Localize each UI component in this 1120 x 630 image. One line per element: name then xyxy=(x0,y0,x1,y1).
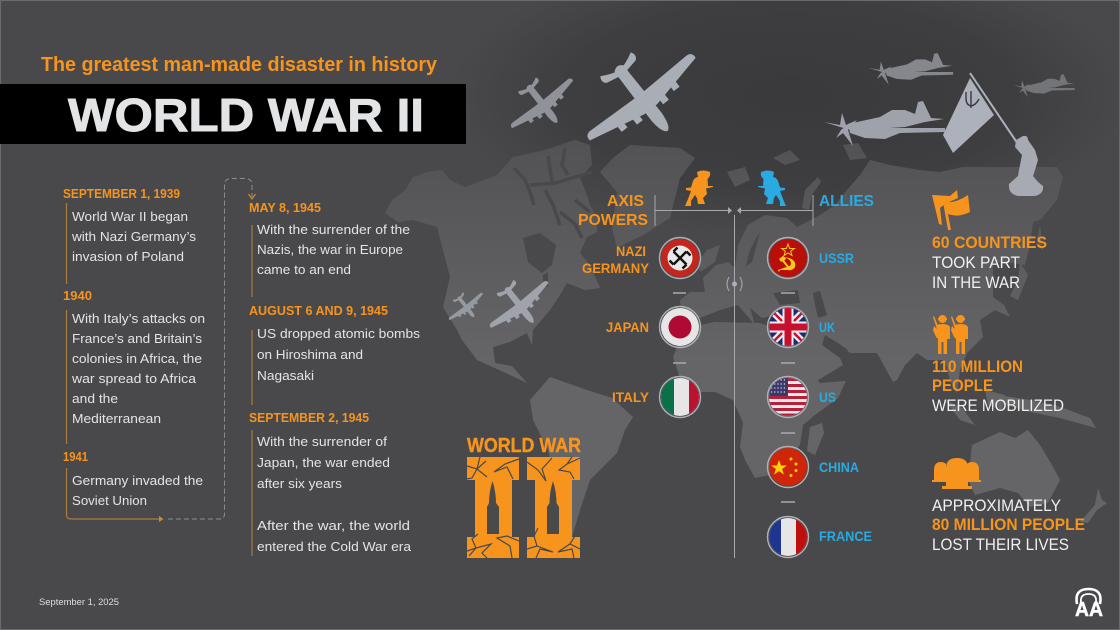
allied country labels: USSR xyxy=(819,251,854,266)
icon: flag of Nazi Germany xyxy=(660,238,700,278)
icon: allies soldier xyxy=(758,170,786,206)
timeline entry: 1940: With Italy’s attacks on xyxy=(72,311,205,326)
timeline entry: 1940 xyxy=(63,289,205,444)
icon: flag of China xyxy=(768,446,808,488)
allied country labels: UK xyxy=(819,320,835,335)
timeline entry: September 1, 1939: SEPTEMBER 1, 1939 xyxy=(63,187,180,201)
stamp heading: WORLD WAR xyxy=(467,435,581,457)
icon: flag of USSR xyxy=(768,238,808,278)
icon: centre target xyxy=(727,277,742,291)
timeline entry: 1941: Soviet Union xyxy=(72,493,147,508)
timeline entry: September 1, 1939: invasion of Poland xyxy=(72,249,184,264)
stat: lives lost: APPROXIMATELY xyxy=(932,497,1061,515)
stamp bullets xyxy=(487,481,559,534)
timeline entry: 1940: colonies in Africa, the xyxy=(72,351,202,366)
icon: flag of France xyxy=(768,516,808,558)
icon: flag of Italy xyxy=(660,376,700,418)
timeline entry: September 2, 1945: SEPTEMBER 2, 1945 xyxy=(249,411,369,425)
stat: lives lost: LOST THEIR LIVES xyxy=(932,536,1069,554)
icon: soldiers xyxy=(933,315,968,354)
stat: lives lost: 80 MILLION PEOPLE xyxy=(932,516,1085,534)
timeline entry: September 2, 1945: With the surrender of xyxy=(257,434,387,449)
stat: countries: 60 COUNTRIES xyxy=(932,234,1047,252)
timeline entry: May 8, 1945 xyxy=(249,201,410,297)
timeline entry: August 6 and 9, 1945: US dropped atomic bombs xyxy=(257,326,421,341)
icon: gravestones xyxy=(932,458,981,489)
timeline entry: August 6 and 9, 1945: on Hiroshima and xyxy=(257,347,363,362)
stat: lives lost xyxy=(932,458,1085,554)
icon: fighter planes xyxy=(824,53,1075,146)
timeline entry: May 8, 1945: came to an end xyxy=(257,262,351,277)
timeline entry: 1940: France’s and Britain’s xyxy=(72,331,203,346)
allies heading: ALLIES xyxy=(819,193,874,210)
stat: people mobilized xyxy=(932,315,1064,415)
timeline entry: August 6 and 9, 1945: Nagasaki xyxy=(257,368,314,383)
timeline entry: September 2, 1945: After the war, the world xyxy=(257,518,410,533)
timeline entry: September 1, 1939: with Nazi Germany’s xyxy=(71,229,197,244)
stat: countries: TOOK PART xyxy=(932,254,1020,272)
stat: countries xyxy=(932,190,1047,292)
date: September 1, 2025 xyxy=(39,597,119,607)
timeline entry: September 2, 1945 xyxy=(249,411,412,556)
timeline entry: 1940: and the xyxy=(72,391,118,406)
icon: flag of US xyxy=(768,376,808,418)
timeline entry: September 2, 1945: entered the Cold War era xyxy=(257,539,412,554)
axis powers heading: POWERS xyxy=(578,212,648,229)
timeline entry: 1940: Mediterranean xyxy=(72,411,161,426)
panel: title xyxy=(0,54,466,144)
icon: AA logo xyxy=(1075,589,1103,621)
heading: WORLD WAR II xyxy=(68,89,424,141)
stat: people mobilized: 110 MILLION xyxy=(932,358,1023,376)
panel: statistics xyxy=(932,190,1085,554)
timeline entry: 1941 xyxy=(63,450,203,508)
axis country labels: ITALY xyxy=(612,390,649,405)
timeline entry: August 6 and 9, 1945: AUGUST 6 AND 9, 1945 xyxy=(249,304,388,318)
arrows: bracket lines xyxy=(655,195,813,558)
timeline entry: May 8, 1945: MAY 8, 1945 xyxy=(249,201,321,215)
timeline entry: September 1, 1939: World War II began xyxy=(72,209,188,224)
title bar xyxy=(0,84,466,144)
allied country labels xyxy=(819,251,872,544)
icon: bomber planes xyxy=(441,23,721,345)
stamp numerals xyxy=(467,457,580,558)
timeline entry: September 2, 1945: Japan, the war ended xyxy=(257,455,390,470)
timeline entry: May 8, 1945: Nazis, the war in Europe xyxy=(257,242,403,257)
icon: axis soldier xyxy=(685,170,713,206)
icon: flag raising statue xyxy=(943,73,1043,196)
panel: timeline right column xyxy=(249,201,421,556)
icon: AA logo: AA xyxy=(1075,599,1103,621)
timeline entry: May 8, 1945: With the surrender of the xyxy=(257,222,410,237)
arrow: timeline connector xyxy=(66,178,256,522)
allied country labels: CHINA xyxy=(819,460,859,475)
axis powers heading xyxy=(578,193,648,229)
panel: timeline left column xyxy=(63,187,205,508)
panel: axis and allies diagram xyxy=(578,193,874,558)
icon: World War II stamp xyxy=(467,435,581,558)
stat: people mobilized: PEOPLE xyxy=(932,377,993,395)
timeline entry: 1941: Germany invaded the xyxy=(72,473,203,488)
world map xyxy=(385,140,1107,537)
icon: flag of UK xyxy=(768,306,808,348)
timeline entry: 1940: war spread to Africa xyxy=(71,371,197,386)
timeline entry: 1941: 1941 xyxy=(63,450,88,464)
axis country labels: GERMANY xyxy=(582,261,649,276)
allied country labels: FRANCE xyxy=(819,529,872,544)
icon: flags xyxy=(932,190,970,230)
stat: people mobilized: WERE MOBILIZED xyxy=(932,397,1064,415)
timeline entry: 1940: 1940 xyxy=(63,289,92,303)
timeline entry: September 1, 1939 xyxy=(63,187,197,284)
axis country labels: JAPAN xyxy=(606,320,649,335)
stamp cracks xyxy=(467,457,580,558)
axis country labels: NAZI xyxy=(616,244,646,259)
stat: countries: IN THE WAR xyxy=(932,274,1020,292)
timeline entry: September 2, 1945: after six years xyxy=(257,476,343,491)
axis country labels xyxy=(582,244,649,405)
allied country labels: US xyxy=(819,390,836,405)
icon: flag of Japan xyxy=(660,306,700,348)
axis powers heading: AXIS xyxy=(607,193,644,210)
subtitle: The greatest man-made disaster in history xyxy=(41,54,438,76)
timeline entry: August 6 and 9, 1945 xyxy=(249,304,421,405)
separators xyxy=(673,293,795,502)
